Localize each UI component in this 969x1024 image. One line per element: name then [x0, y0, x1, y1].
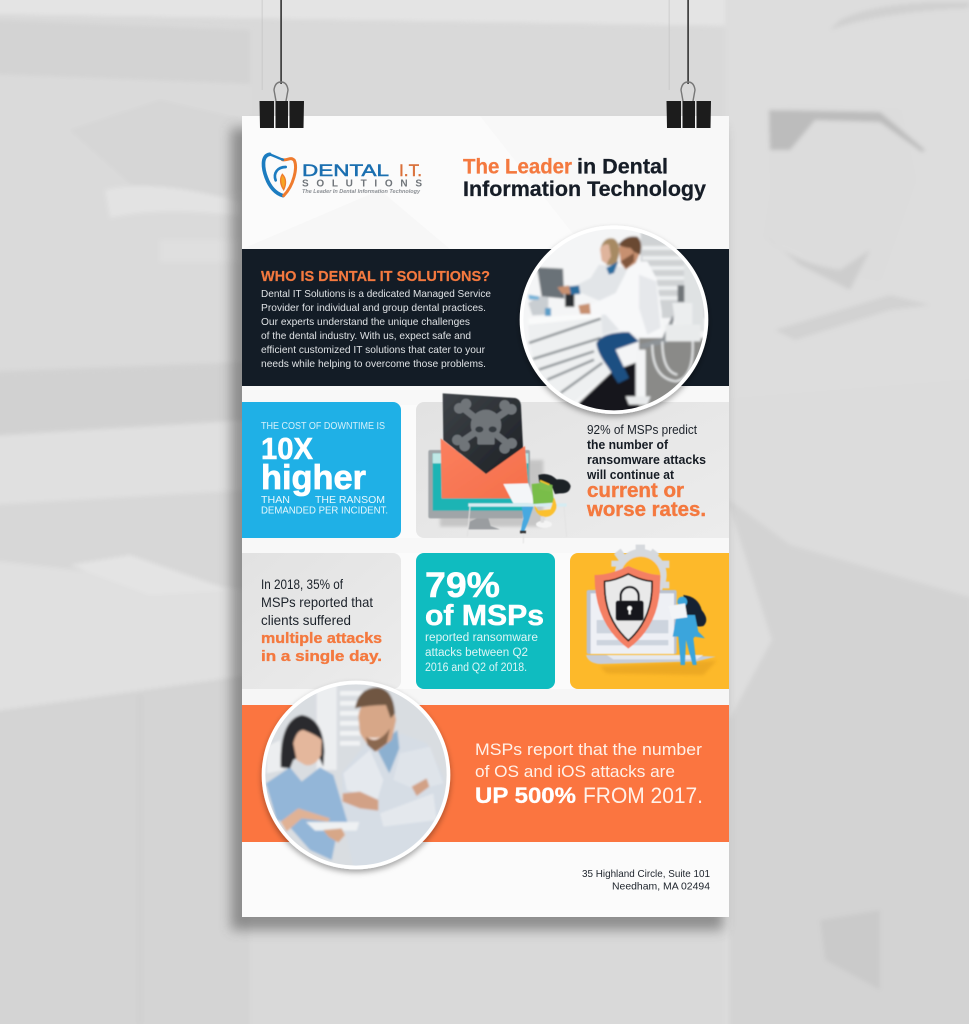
- statement text: [475, 741, 703, 781]
- address: 35 Highland Circle, Suite 101: [582, 869, 710, 880]
- dental unit: [672, 303, 692, 325]
- body text: Dental IT Solutions is a dedicated Managed Service: [261, 289, 491, 300]
- title: [463, 156, 706, 201]
- supporting text: [425, 632, 538, 674]
- orange emphasis: current or: [587, 480, 684, 502]
- address: [582, 869, 710, 892]
- panel: who is Dental IT Solutions: [242, 249, 729, 386]
- illustration: shield and laptop: [586, 545, 717, 675]
- heading: WHO IS DENTAL IT SOLUTIONS?: [261, 269, 490, 285]
- logo wordmark: DENTAL: [302, 161, 389, 180]
- panel: ransomware prediction: ransomware attacks: [587, 453, 706, 467]
- gear: [611, 545, 669, 601]
- stat: up 500%: UP 500%: [475, 783, 576, 808]
- orange emphasis: [261, 630, 382, 665]
- logo: Dental I.T. Solutions: [263, 154, 422, 196]
- poster drop shadow: [231, 128, 723, 930]
- jeans: [596, 332, 639, 385]
- panel: 79% of MSPs: [416, 553, 555, 689]
- closing lines: THE RANSOM: [315, 494, 385, 506]
- orange emphasis: worse rates.: [586, 499, 706, 521]
- photo: dentists at computer: [519, 225, 709, 415]
- panel: ransomware prediction: will continue at: [586, 468, 675, 482]
- supporting text: attacks between Q2: [425, 647, 528, 659]
- body text: of the dental industry. With us, expect safe and: [261, 331, 471, 342]
- statement text: In 2018, 35% of: [261, 576, 343, 592]
- man head: [358, 698, 396, 752]
- man coat: [342, 733, 445, 867]
- orange emphasis: [586, 480, 706, 521]
- logo SOLUTIONS: SOLUTIONS: [302, 178, 422, 190]
- logo I.T.: I.T.: [399, 161, 422, 180]
- padlock: [621, 587, 639, 601]
- logo tagline: The Leader In Dental Information Technology: [302, 189, 420, 195]
- supporting text: 2016 and Q2 of 2018.: [425, 662, 527, 674]
- binder clip: right: [666, 0, 711, 128]
- icon: tooth: [263, 154, 295, 196]
- statement text: [261, 576, 373, 628]
- statement text: clients suffered: [261, 612, 351, 628]
- man hands: [343, 792, 378, 811]
- title: The Leader: [463, 156, 572, 178]
- intro line: THE COST OF DOWNTIME IS: [261, 421, 385, 432]
- higher stat: higher: [261, 459, 366, 497]
- woman: [576, 265, 629, 335]
- panel: cost of downtime: [242, 402, 401, 538]
- binder clip: left: [260, 0, 304, 128]
- body text: Provider for individual and group dental practices.: [261, 303, 486, 314]
- floor: [639, 338, 706, 415]
- body text: efficient customized IT solutions that cater to your: [261, 345, 486, 356]
- 10X stat: 10X: [261, 431, 313, 466]
- person: [683, 595, 706, 627]
- panel: ransomware prediction: the number of: [587, 438, 669, 452]
- stat: of MSPs: of MSPs: [425, 600, 544, 632]
- panel: multiple attacks: [242, 553, 401, 689]
- laptop: [587, 590, 677, 654]
- statement text: MSPs report that the number: [475, 741, 703, 759]
- tablet: [306, 822, 359, 831]
- closing lines: [261, 494, 388, 516]
- skull flag: [443, 393, 523, 474]
- photo: dentists with tablet: [260, 680, 452, 870]
- panel: ransomware prediction: [416, 393, 729, 543]
- closing lines: THAN: [261, 494, 290, 506]
- title: Information Technology: [463, 178, 706, 201]
- body text: needs while helping to overcome those problems.: [261, 359, 486, 370]
- counter: [528, 315, 611, 403]
- stool: [639, 315, 674, 349]
- orange emphasis: multiple attacks: [261, 630, 382, 647]
- statement text: 92% of MSPs predict: [587, 423, 697, 437]
- man: [600, 260, 662, 330]
- panel: OS and iOS attacks banner: [242, 705, 729, 842]
- orange emphasis: in a single day.: [261, 648, 382, 665]
- body text: [261, 289, 491, 370]
- person at desk: [532, 482, 554, 504]
- statement text: MSPs reported that: [261, 594, 373, 610]
- closing lines: DEMANDED PER INCIDENT.: [261, 504, 388, 516]
- poster sheet: [242, 116, 729, 917]
- desk and laptop: [503, 483, 535, 503]
- woman: [266, 767, 347, 860]
- panel: security illustration: [570, 545, 729, 689]
- statement text: of OS and iOS attacks are: [475, 763, 675, 781]
- monitor: [428, 450, 530, 518]
- envelope: [441, 438, 528, 498]
- stat: 79%: 79%: [425, 566, 500, 605]
- monitor: [537, 267, 564, 299]
- illustration: skull email on monitor: [428, 393, 571, 543]
- shield: [595, 566, 660, 649]
- body text: Our experts understand the unique challenges: [261, 317, 470, 328]
- title: in Dental: [577, 156, 668, 178]
- supporting text: reported ransomware: [425, 632, 538, 644]
- address: Needham, MA 02494: [612, 882, 710, 892]
- stat: from 2017: FROM 2017.: [583, 783, 703, 808]
